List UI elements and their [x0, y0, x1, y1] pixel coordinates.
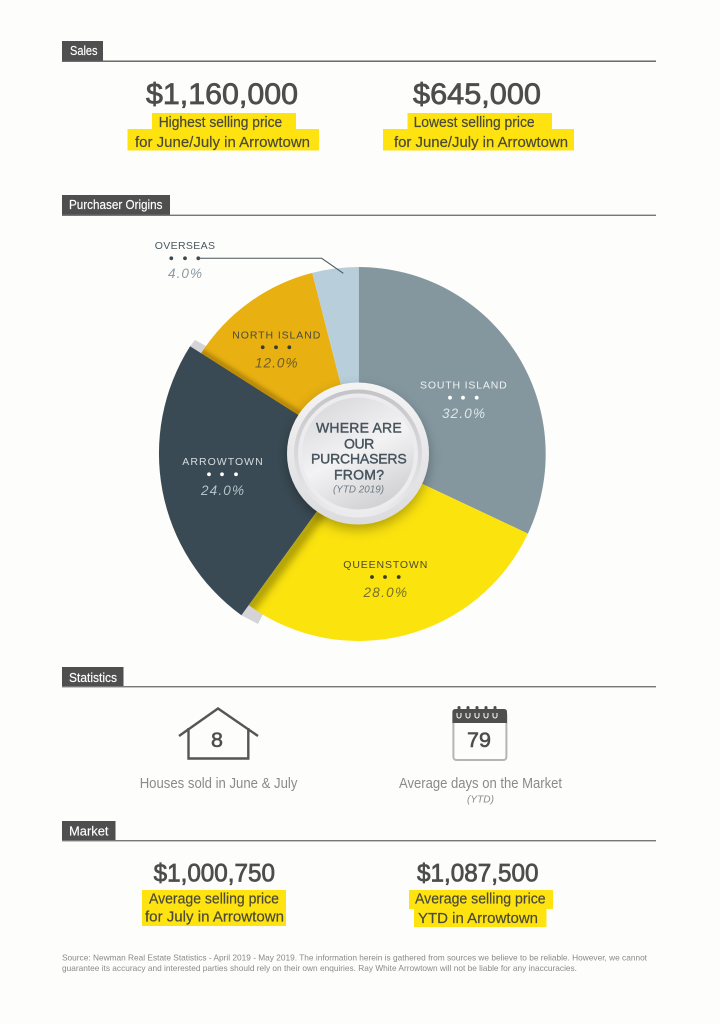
stat: average selling price July: Average selling price — [149, 890, 279, 907]
section: statistics — [62, 667, 656, 806]
caption: houses sold: Houses sold in June & July — [140, 776, 298, 792]
label: arrowtown — [182, 456, 263, 498]
heading: sales — [62, 41, 103, 62]
heading: market: Market — [69, 824, 109, 839]
source note — [62, 953, 648, 973]
icon: calendar with 79 — [452, 706, 507, 760]
heading: purchaser origins: Purchaser Origins — [69, 197, 163, 212]
pie chart — [155, 240, 546, 641]
label: north island: 12.0% — [255, 355, 298, 370]
centre badge: (YTD 2019) — [333, 484, 384, 496]
heading: statistics: Statistics — [69, 670, 117, 685]
label: north island — [232, 329, 321, 370]
centre badge: FROM? — [334, 466, 384, 482]
caption: average days on market: Average days on the Market — [399, 776, 562, 792]
stat: lowest selling price: $645,000 — [413, 78, 541, 111]
heading: purchaser origins — [62, 195, 170, 216]
label: south island: SOUTH ISLAND — [420, 379, 507, 391]
slice: overseas 4% — [312, 267, 359, 454]
caption: average days on market: (YTD) — [467, 794, 494, 806]
slice: north island 12% — [201, 273, 359, 454]
stat: average selling price July: $1,000,750 — [154, 860, 275, 888]
stat: highest selling price — [128, 78, 319, 151]
source note: guarantee its accuracy and interested parties should rely on their own enquiries. Ray White Arrowtown will not be liable for any inaccuracies. — [62, 963, 577, 973]
heading: statistics — [62, 667, 124, 687]
stat: average selling price July: for July in Arrowtown — [145, 909, 284, 926]
section: sales — [62, 41, 656, 151]
label: queenstown — [343, 559, 427, 600]
stat: lowest selling price — [383, 78, 574, 151]
slice edge: pale slivers beside arrowtown — [190, 340, 263, 624]
slice: queenstown 28% — [249, 454, 528, 641]
icon: calendar with 79: 79 — [467, 728, 491, 752]
label: arrowtown: 24.0% — [200, 483, 244, 498]
slice: south island 32% — [359, 267, 546, 534]
stat: lowest selling price: for June/July in Arrowtown — [394, 134, 568, 151]
heading: market — [62, 821, 116, 841]
stat: highest selling price: for June/July in Arrowtown — [135, 134, 310, 151]
stat: average selling price YTD: $1,087,500 — [417, 860, 538, 888]
centre badge: OUR — [344, 435, 374, 451]
stat: average selling price July — [142, 860, 286, 926]
label: south island: 32.0% — [442, 406, 485, 421]
stat: highest selling price: Highest selling price — [159, 114, 282, 131]
stat: lowest selling price: Lowest selling price — [414, 114, 535, 131]
heading: sales: Sales — [70, 43, 98, 58]
label: arrowtown: ARROWTOWN — [182, 456, 263, 468]
section: market — [62, 821, 656, 927]
label: south island — [420, 379, 507, 421]
infographic page — [62, 41, 656, 972]
stat: highest selling price: $1,160,000 — [146, 78, 298, 111]
icon: house with 8: 8 — [211, 728, 223, 752]
stat: average selling price YTD: YTD in Arrowtown — [418, 910, 538, 927]
shadow on queenstown slice — [246, 510, 322, 612]
label: overseas: 4.0% — [168, 266, 202, 281]
slice: arrowtown 24% — [159, 346, 359, 615]
label: queenstown: 28.0% — [362, 585, 407, 600]
shadow on north island slice — [196, 348, 300, 414]
centre badge: WHERE ARE — [316, 419, 402, 435]
stat: average selling price YTD: Average selling price — [415, 890, 546, 907]
caption: average days on market — [399, 776, 562, 806]
source note: Source: Newman Real Estate Statistics - April 2019 - May 2019. The information herein is gathered from sources we believe to be reliable. However, we cannot — [62, 953, 648, 963]
centre badge: PURCHASERS — [311, 451, 407, 467]
label: overseas — [155, 240, 343, 281]
centre badge — [287, 382, 429, 524]
label: north island: NORTH ISLAND — [232, 329, 321, 341]
section: purchaser origins — [62, 195, 656, 641]
stat: average selling price YTD — [409, 860, 553, 927]
label: overseas: OVERSEAS — [155, 240, 215, 252]
label: queenstown: QUEENSTOWN — [343, 559, 427, 571]
icon: house with 8 — [179, 708, 258, 758]
